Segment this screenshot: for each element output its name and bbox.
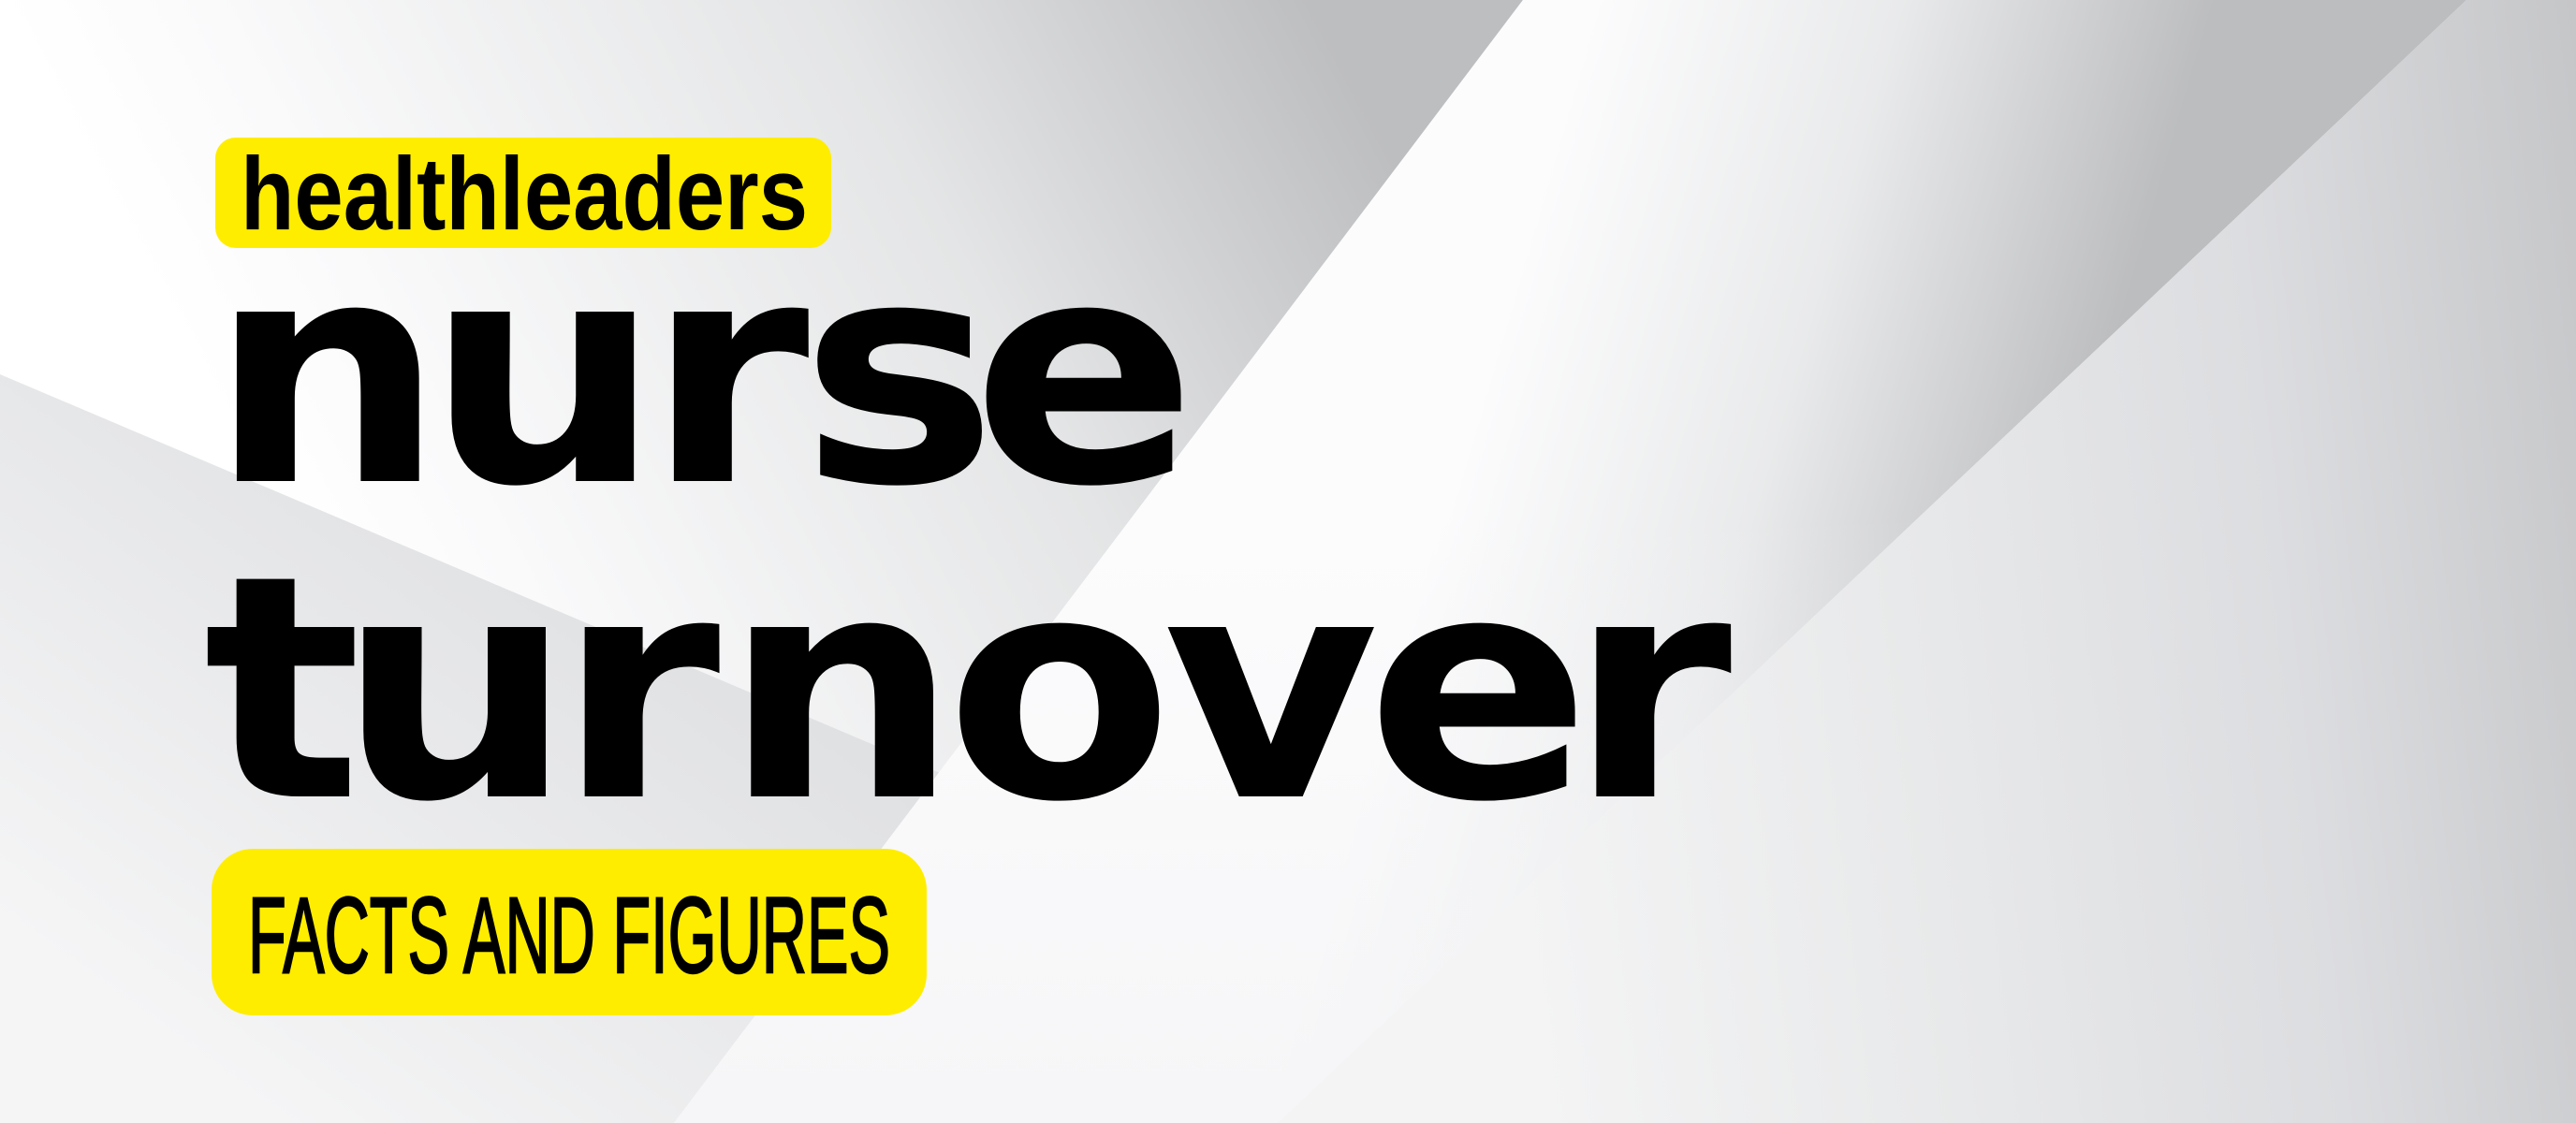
badge text: FACTS AND FIGURES bbox=[248, 876, 890, 996]
title line 1: nurse bbox=[209, 194, 1197, 554]
title line 2: turnover bbox=[203, 509, 1734, 869]
title bbox=[203, 194, 1734, 869]
logo plate bbox=[215, 138, 831, 248]
logo: healthleaders on yellow plate bbox=[215, 137, 831, 252]
logo wordmark: healthleaders bbox=[241, 137, 808, 252]
badge plate bbox=[212, 849, 927, 1015]
subtitle badge bbox=[212, 849, 927, 1015]
